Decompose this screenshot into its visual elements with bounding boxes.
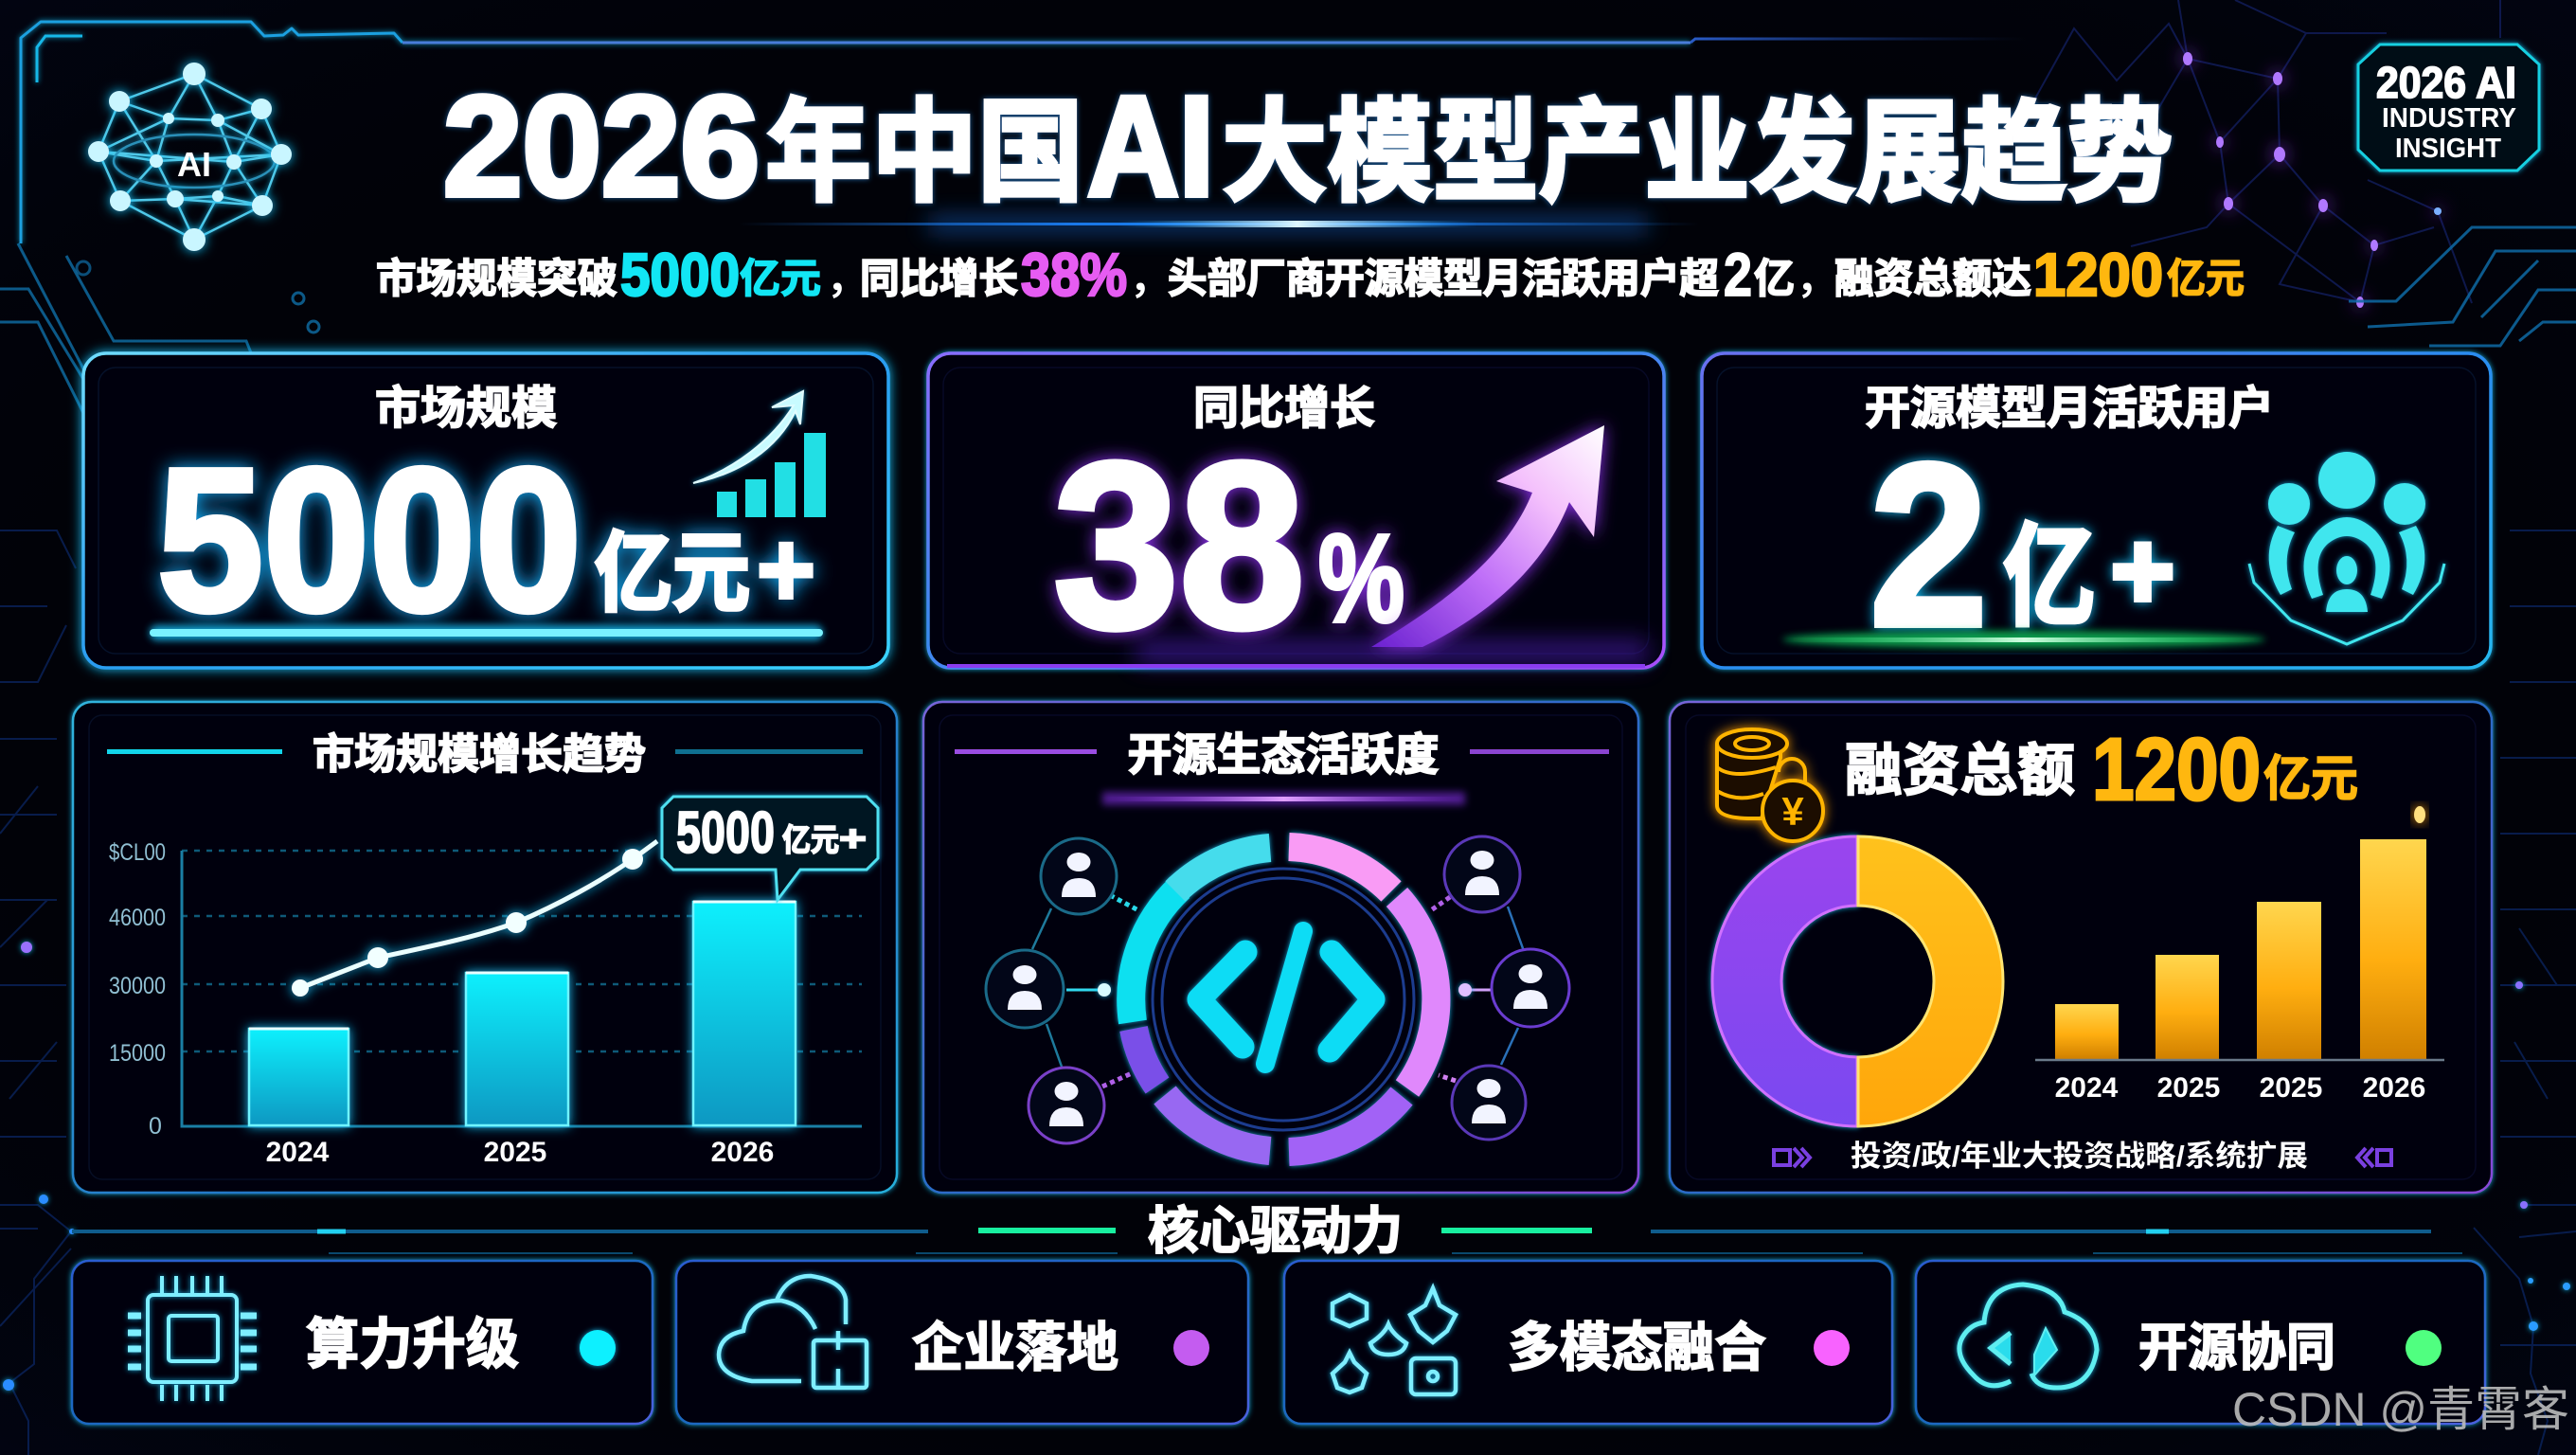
panel: open-source MAU KPI [1702, 353, 2491, 674]
card: compute upgrade [72, 1261, 653, 1424]
axis labels [109, 839, 166, 1140]
icon: code cloud [1959, 1284, 2097, 1388]
subtitle: 同比增长 [860, 257, 1018, 302]
badge: 2026 AI industry insight [2358, 45, 2539, 171]
background network top right [2027, 0, 2500, 308]
axis labels: 0 [149, 1113, 162, 1140]
value: 5000: 亿元 [595, 526, 750, 622]
underline [150, 625, 823, 640]
value: 200M+: 亿 [2003, 515, 2096, 640]
heading: open-source MAU: 开源模型月活跃用户 [1865, 384, 2274, 434]
funding bar chart: 2026 [2363, 1072, 2425, 1104]
icon: users [2249, 452, 2444, 644]
subtitle: 亿 [1754, 257, 1795, 302]
bars [249, 902, 796, 1125]
title: 大模型产业发展趋势 [1222, 91, 2173, 216]
heading: market size: 市场规模 [375, 384, 557, 434]
subtitle: 5000 [620, 241, 740, 309]
watermark: CSDN @青霄客 [2232, 1383, 2569, 1436]
value: 5000: 5000 [157, 425, 581, 654]
panel: market size KPI [83, 353, 888, 668]
value: 5000 [157, 425, 815, 654]
background network nodes right [2515, 981, 2570, 1331]
axis labels: 15000 [109, 1040, 166, 1067]
heading: market growth trend: 市场规模增长趋势 [313, 731, 646, 778]
callout: 5000 [662, 797, 878, 900]
badge: 2026 AI industry insight: INDUSTRY [2382, 103, 2516, 134]
label: 多模态融合 [1508, 1318, 1766, 1377]
year labels [266, 1137, 774, 1168]
heading: market growth trend [107, 731, 863, 778]
section heading: core drivers: 核心驱动力 [1148, 1203, 1403, 1260]
subtitle: 1200 [2033, 241, 2163, 309]
value: 200M+ [1869, 415, 2174, 674]
subtitle: 38% [1021, 241, 1127, 309]
panel: total funding [1670, 702, 2492, 1193]
panel: YoY growth KPI [928, 353, 1664, 677]
callout: 5000: 亿元 [782, 822, 839, 857]
subtitle: 头部厂商开源模型月活跃用户超 [1168, 257, 1719, 302]
background circuits left [0, 243, 319, 1455]
arrow: growth [1371, 425, 1604, 647]
node connections [1032, 895, 1524, 1087]
donut chart [1712, 836, 2003, 1126]
icon: chip [128, 1276, 257, 1401]
background circuits right [2349, 227, 2576, 1455]
subtitle: ， [1796, 257, 1836, 302]
title underline glow [739, 218, 1699, 231]
value: 38%: % [1318, 509, 1404, 648]
ring chart [1131, 847, 1436, 1152]
status dot [2406, 1330, 2442, 1366]
value: 5000: + [757, 511, 815, 629]
badge: 2026 AI industry insight: 2026 AI [2376, 58, 2516, 107]
card: open-source collaboration [1916, 1261, 2485, 1424]
icon: cloud and box [719, 1276, 867, 1388]
header frame [21, 22, 1690, 243]
label: 开源协同 [2138, 1320, 2335, 1376]
title [443, 66, 2173, 225]
header frame fade [1690, 39, 2027, 43]
card: enterprise adoption [676, 1261, 1248, 1424]
subtitle: 市场规模突破 [376, 257, 617, 302]
value: 38%: 38 [1053, 413, 1305, 677]
status dot [580, 1330, 616, 1366]
axis labels: 46000 [109, 905, 166, 931]
bar and line chart [109, 797, 878, 1168]
subtitle: 融资总额达 [1834, 257, 2031, 302]
year labels: 2026 [711, 1137, 774, 1168]
heading: total funding: 1200 [2092, 720, 2261, 818]
section heading: core drivers [72, 1203, 2462, 1260]
status dot [1173, 1330, 1209, 1366]
callout: 5000: 5000 [676, 800, 775, 866]
subtitle: 2 [1724, 241, 1752, 309]
caption: 投资/政/年业大投资战略/系统扩展 [1851, 1140, 2308, 1173]
callout: 5000: + [839, 819, 867, 859]
green glow line [1782, 631, 2265, 648]
icon: multimodal shapes [1333, 1288, 1456, 1394]
icon: coins: ¥ [1781, 789, 1804, 834]
icon: neural network AI [88, 63, 292, 251]
heading: total funding: 亿元 [2263, 752, 2358, 807]
icon: coins [1717, 729, 1823, 841]
panel: market growth trend [73, 702, 897, 1193]
label: 企业落地 [912, 1318, 1118, 1377]
funding bar chart: 2025 [2260, 1072, 2322, 1104]
heading: total funding: 融资总额 [1845, 739, 2075, 802]
background network nodes left [3, 942, 75, 1391]
funding bar chart: 2025 [2157, 1072, 2220, 1104]
title: 年中国 [765, 91, 1083, 216]
heading: YoY growth: 同比增长 [1193, 384, 1375, 434]
badge: 2026 AI industry insight: INSIGHT [2395, 134, 2501, 164]
icon: code [1199, 931, 1373, 1064]
year labels: 2024 [266, 1137, 330, 1168]
subtitle: ， [826, 257, 867, 302]
subtitle: 亿元 [2167, 257, 2245, 302]
subtitle [376, 241, 2245, 309]
trend line [292, 841, 657, 997]
label: 算力升级 [306, 1314, 519, 1375]
icon: neural network AI: AI [177, 145, 211, 184]
title: AI [1087, 66, 1214, 225]
status dot [1814, 1330, 1850, 1366]
heading: ecosystem [955, 729, 1609, 805]
heading: ecosystem: 开源生态活跃度 [1127, 729, 1440, 780]
value: 200M+: + [2111, 511, 2174, 632]
card: multimodal fusion [1284, 1261, 1892, 1424]
user nodes [986, 836, 1569, 1143]
funding bar chart: 2024 [2055, 1072, 2119, 1104]
subtitle: 亿元 [740, 257, 821, 302]
year labels: 2025 [484, 1137, 546, 1168]
subtitle: ， [1129, 257, 1170, 302]
heading: total funding [1845, 720, 2358, 818]
axis labels: 30000 [109, 973, 166, 999]
icon: growth bars and arrow [693, 391, 826, 517]
funding bar chart [2035, 806, 2444, 1104]
value: 200M+: 2 [1869, 415, 1988, 674]
panel: open-source ecosystem [923, 702, 1638, 1193]
axis labels: $CL00 [109, 839, 166, 866]
title: 2026 [443, 66, 760, 225]
